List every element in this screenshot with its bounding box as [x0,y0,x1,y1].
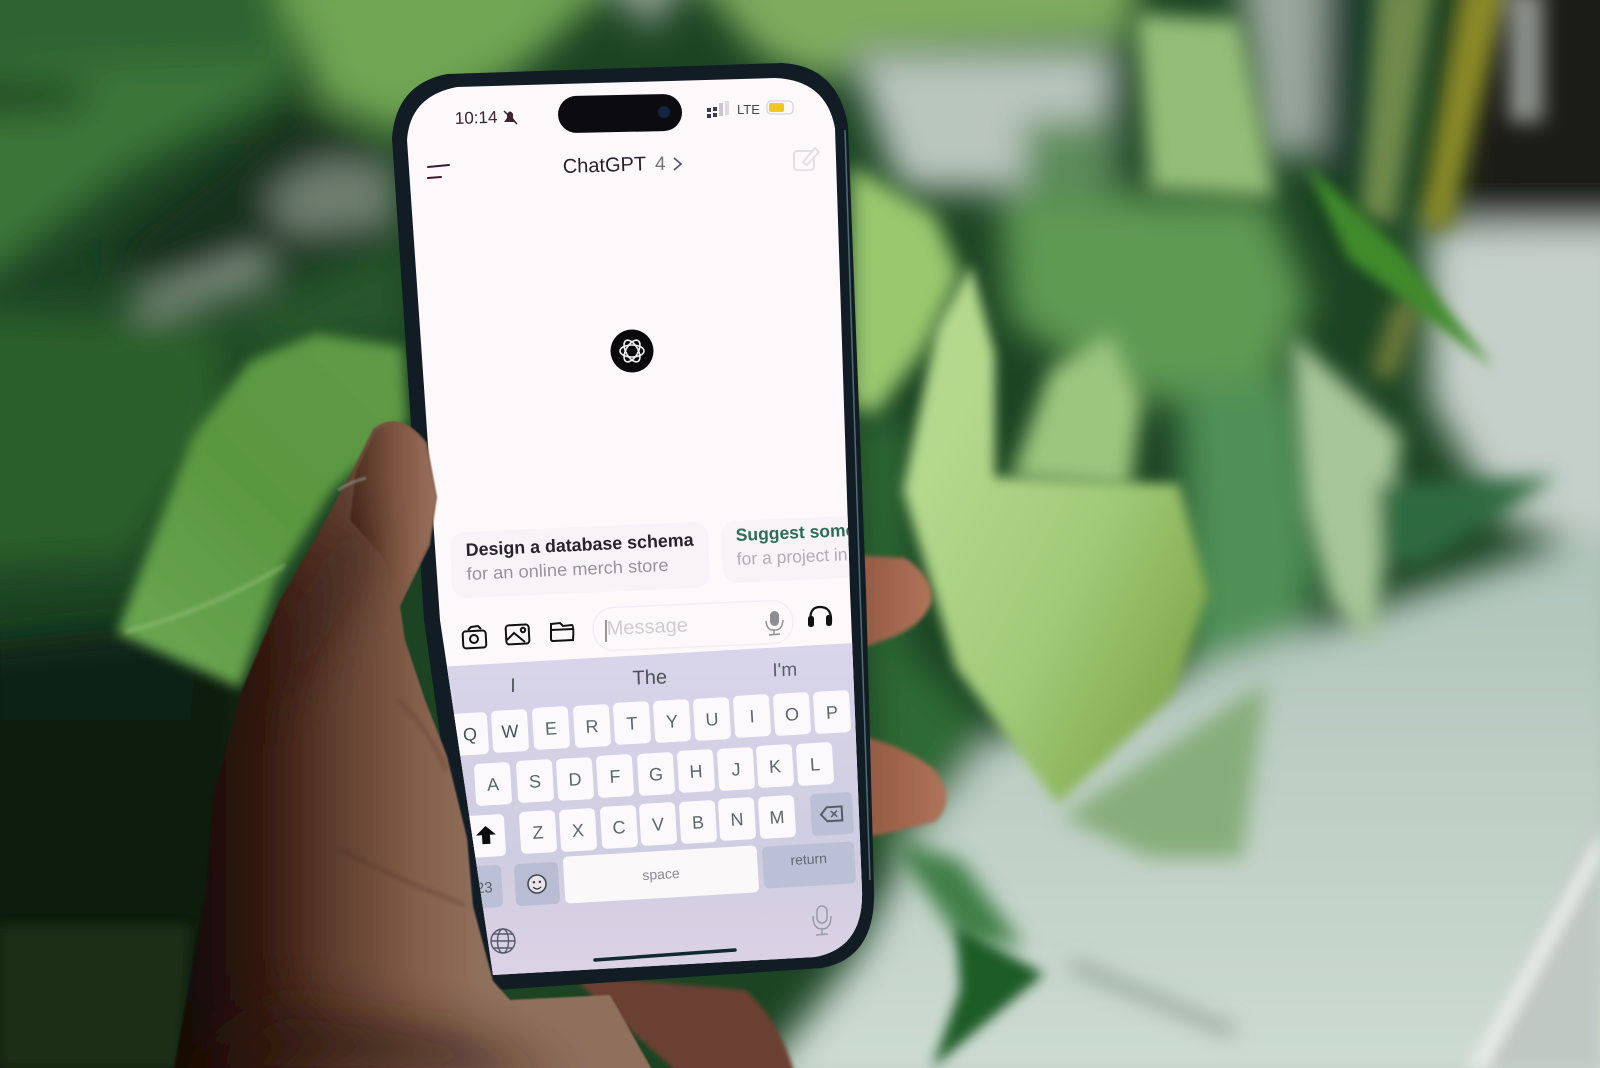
screen background [407,78,862,975]
icon: image [506,624,530,645]
row 2 [474,742,834,806]
thumb highlight [350,424,435,600]
left leaf midrib [125,565,285,632]
icon: folder [551,623,573,641]
keyboard keys [451,690,856,909]
finger: lower [570,975,795,1068]
icon: globe [491,929,515,953]
icon: silent bell [504,111,517,124]
card 1 heading: Design a database schema [465,530,695,560]
icon: menu [428,165,449,178]
model number: 4 [655,154,666,175]
row 4: return [790,850,827,868]
smartphone [380,60,893,1000]
row 2: F [609,766,621,787]
row 3 [466,792,854,858]
row 3: X [571,820,585,841]
row 1: E [544,718,558,739]
icon: camera [463,626,486,649]
palm and thumb [173,421,655,1068]
fingernail shadow [338,478,366,490]
camera lens [658,106,670,118]
cursor [605,620,607,642]
message input [592,600,794,651]
icon: mic [766,611,783,635]
row 2: D [568,769,582,790]
phone frame highlight [845,130,870,880]
suggestion card 1 [466,534,694,580]
card 1 subtext: for an online merch store [466,555,669,584]
row 2: H [689,761,703,782]
keyboard area [447,643,862,975]
row 2: L [809,754,821,775]
dynamic island [558,94,682,133]
suggestion I: I [510,676,516,697]
row 1 [451,690,851,756]
row 3: B [691,812,705,833]
row 4 [457,841,856,909]
thumb and palm shading [170,500,560,1068]
header title: ChatGPT [562,153,646,178]
signal dots [707,101,729,118]
mid-focus leaves [850,0,1557,1036]
row 1: R [585,716,599,737]
row 3: M [769,807,785,828]
row 1: T [626,713,638,734]
row 3: N [730,809,744,830]
row 1: U [705,709,719,730]
row 2: K [768,756,782,777]
row 3: Z [532,822,544,843]
screen [407,78,862,975]
phone body frame [392,63,874,990]
row 4: 123 [467,879,493,898]
row 2: A [486,774,500,795]
row 3: V [651,814,665,835]
row 1: Y [665,711,679,732]
shadow on the lower palm [170,1000,560,1068]
row 2: J [731,759,741,780]
home indicator [595,950,735,960]
shadow below the thumb [260,500,370,720]
icon: headphones [808,607,832,627]
suggestion The: The [632,666,667,690]
finger: middle [855,735,946,838]
row 1: Q [462,724,478,745]
palm creases [340,700,465,905]
suggestion I'm: I'm [772,660,798,681]
row 2: G [648,764,664,785]
row 1: O [784,704,800,725]
row 4: space [642,865,680,883]
card 2 subtext: for a project in [736,544,848,569]
ChatGPT logo [610,330,654,372]
network label: LTE [737,102,760,117]
finger: upper [850,555,932,652]
row 1: P [825,702,839,723]
placeholder: Message [606,614,688,640]
keyboard suggestions [512,663,796,692]
chevron [674,158,681,170]
row 2: S [528,771,542,792]
fingers behind the phone [570,555,946,1068]
row 1: W [501,721,519,742]
suggestion card 2 [736,516,850,578]
row 1: I [749,706,755,727]
hand and thumb holding the phone [170,421,655,1068]
icon: dictation mic [813,906,831,935]
card 2 heading: Suggest some [735,520,856,545]
battery [767,101,793,114]
status time: 10:14 [455,108,498,128]
row 3: C [612,817,626,838]
icon: compose [794,148,819,170]
